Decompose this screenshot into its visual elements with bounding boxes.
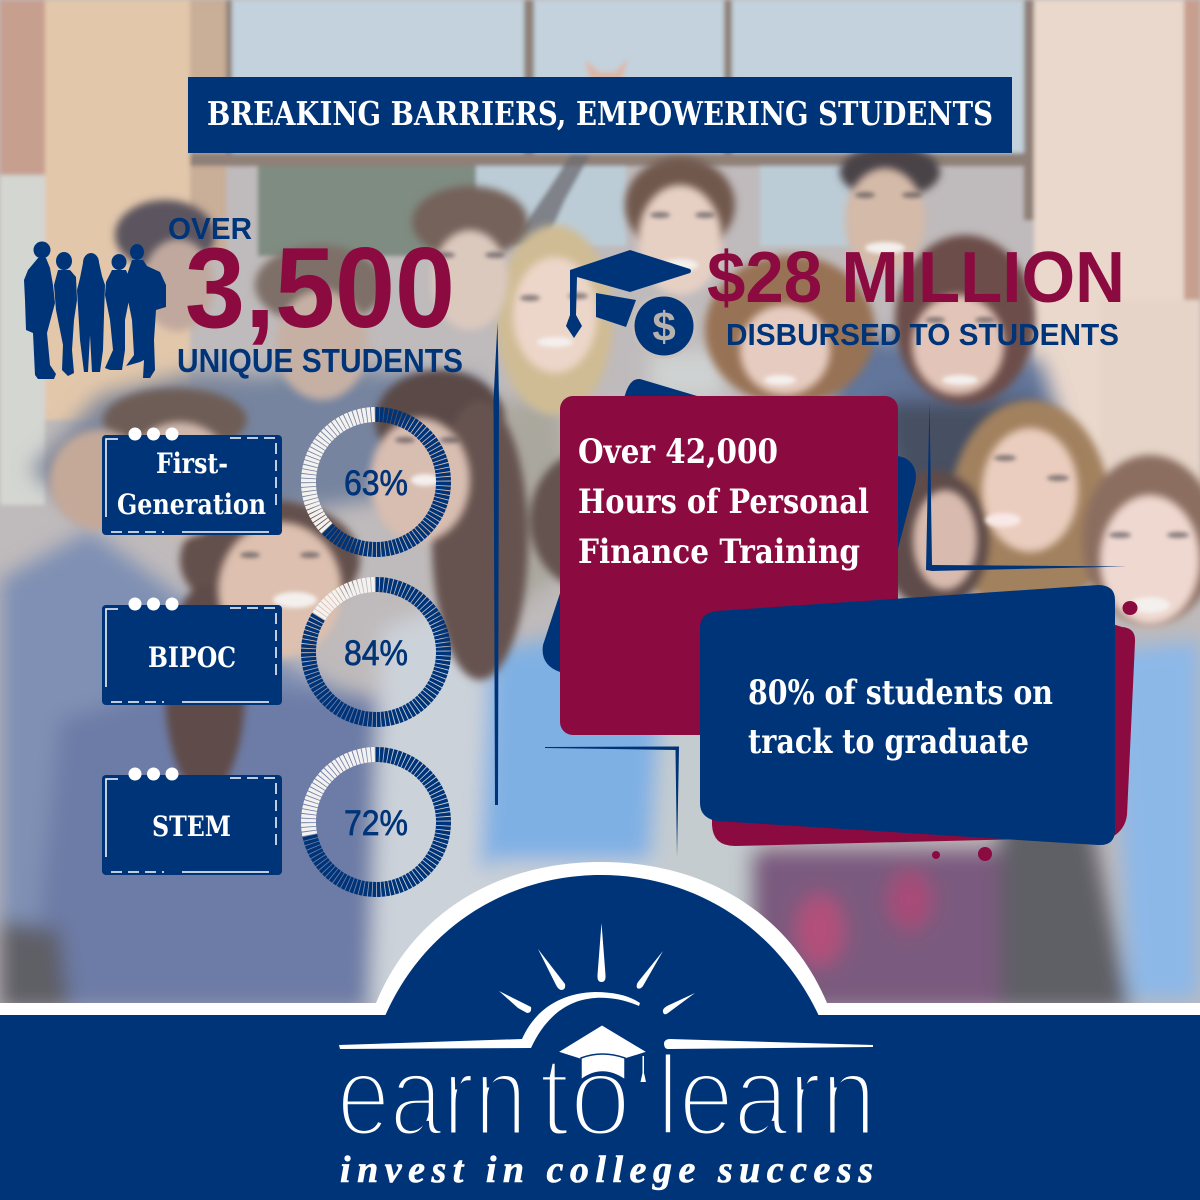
stat: over 3,500 unique students xyxy=(168,211,463,379)
label: STEM xyxy=(102,768,282,875)
panel: on track to graduate xyxy=(700,585,1115,845)
logo wordmark xyxy=(337,1033,876,1160)
logo graduation cap xyxy=(558,1025,647,1084)
logo: earn to learn xyxy=(337,923,876,1191)
ring chart: 84% xyxy=(308,584,444,720)
panel: on track to graduate: track to graduate xyxy=(748,722,1029,762)
logo sun rays xyxy=(339,923,873,1049)
ring chart: 63%: 63% xyxy=(344,464,408,503)
label: BIPOC: BIPOC xyxy=(148,641,236,674)
central vertical divider xyxy=(494,322,499,805)
logo wordmark: learn xyxy=(657,1033,876,1160)
logo wordmark: to xyxy=(539,1033,631,1160)
navy accent shape behind training card xyxy=(543,379,916,672)
accent corner line lower left xyxy=(545,746,679,857)
footer band with arch xyxy=(0,862,1200,1200)
panel: personal finance training: Hours of Personal xyxy=(578,482,869,522)
ring chart: 63% xyxy=(308,414,444,550)
maroon backing shape for graduation card xyxy=(712,620,1135,846)
logo tagline: invest in college success xyxy=(340,1149,873,1191)
title banner xyxy=(188,77,1012,153)
label: BIPOC xyxy=(102,598,282,705)
icon: graduation cap with dollar coin xyxy=(566,250,697,359)
ring chart: 72% xyxy=(308,754,444,890)
icon: group of student silhouettes xyxy=(24,242,166,379)
panel: personal finance training: Over 42,000 xyxy=(578,432,778,472)
decorative maroon dots xyxy=(932,601,1138,861)
stat: $28 million disbursed: DISBURSED TO STUDENTS xyxy=(726,317,1119,352)
panel: on track to graduate: 80% of students on xyxy=(748,673,1053,713)
icon: graduation cap with dollar coin: $ xyxy=(652,303,676,350)
stat: over 3,500 unique students: UNIQUE STUDENTS xyxy=(177,342,463,379)
label: first-generation xyxy=(102,428,282,535)
label: first-generation: Generation xyxy=(117,488,266,521)
panel: personal finance training xyxy=(560,396,898,735)
stat: over 3,500 unique students: 3,500 xyxy=(185,225,455,352)
ring chart: 72%: 72% xyxy=(344,804,408,843)
label: STEM: STEM xyxy=(152,810,231,843)
accent corner line upper right xyxy=(926,402,1127,571)
stat: $28 million disbursed xyxy=(707,238,1125,352)
stat: over 3,500 unique students: OVER xyxy=(168,211,252,246)
logo wordmark: earn xyxy=(337,1033,527,1160)
panel: personal finance training: Finance Training xyxy=(578,532,860,572)
ring chart: 84%: 84% xyxy=(344,634,408,673)
stat: $28 million disbursed: $28 MILLION xyxy=(707,238,1125,318)
title banner: BREAKING BARRIERS, EMPOWERING STUDENTS xyxy=(207,94,993,133)
label: first-generation: First- xyxy=(156,447,228,480)
